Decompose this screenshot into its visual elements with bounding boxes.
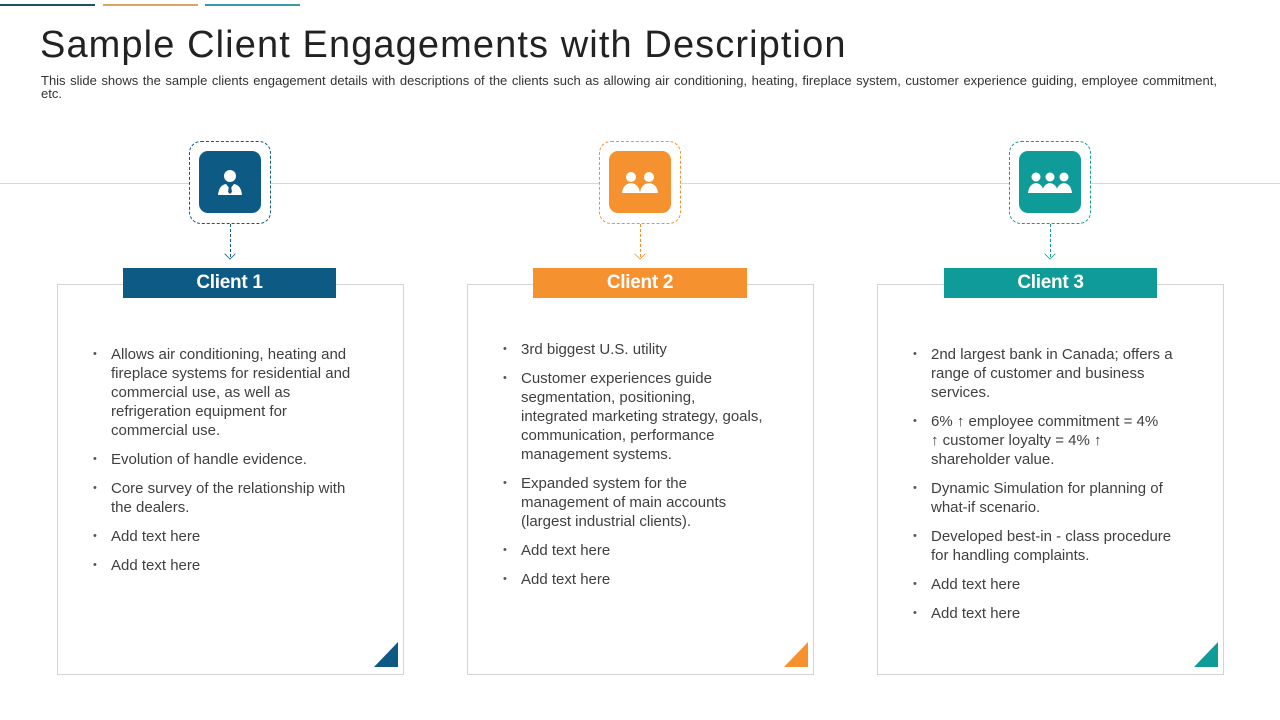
header: Client 1	[196, 272, 263, 293]
header: Client 2	[607, 272, 673, 293]
icon: person	[189, 141, 271, 224]
card	[467, 284, 814, 675]
icon: group	[1009, 141, 1091, 224]
text: Add text here	[111, 528, 200, 545]
text: integrated marketing strategy, goals, communication, performance management systems.	[521, 408, 763, 463]
panel: client 1	[57, 141, 404, 675]
text: Dynamic Simulation for planning of what-if scenario.	[931, 480, 1163, 516]
text: shareholder value.	[931, 451, 1054, 468]
header: Client 3	[1017, 272, 1084, 293]
subtitle: This slide shows the sample clients engagement details with descriptions of the clients such as allowing air conditioning, heating, fireplace system, customer experience guiding, employee commitment, etc.	[41, 73, 1217, 101]
top accent lines	[0, 4, 300, 6]
corner triangle	[1194, 642, 1218, 667]
arrow	[230, 224, 231, 257]
arrow	[640, 224, 641, 257]
text: Evolution of handle evidence.	[111, 451, 307, 468]
text: 2nd largest bank in Canada; offers a range of customer and business services.	[931, 346, 1173, 401]
header	[533, 268, 747, 298]
text: ↑ customer loyalty = 4% ↑	[931, 432, 1101, 449]
corner triangle	[784, 642, 808, 667]
text	[913, 346, 1173, 622]
text: Customer experiences guide segmentation, positioning,	[521, 370, 712, 406]
header	[123, 268, 336, 298]
text: Add text here	[111, 557, 200, 574]
card	[877, 284, 1224, 675]
text: Core survey of the relationship with the dealers.	[111, 480, 345, 516]
text: 6% ↑ employee commitment = 4%	[931, 413, 1158, 430]
text: Add text here	[521, 571, 610, 588]
text: Add text here	[931, 605, 1020, 622]
text: Developed best-in - class procedure for handling complaints.	[931, 528, 1171, 564]
panel: client 2	[467, 141, 814, 675]
text: Allows air conditioning, heating and fireplace systems for residential and commercial use, as well as refrigeration equipment for commercial use.	[111, 346, 350, 439]
arrow	[1050, 224, 1051, 257]
icon: two people	[599, 141, 681, 224]
header	[944, 268, 1157, 298]
text: 3rd biggest U.S. utility	[521, 341, 667, 358]
corner triangle	[374, 642, 398, 667]
text	[93, 346, 350, 574]
text: Expanded system for the management of main accounts (largest industrial clients).	[521, 475, 726, 530]
card	[57, 284, 404, 675]
text: Add text here	[931, 576, 1020, 593]
title: Sample Client Engagements with Description	[40, 24, 847, 66]
text: Add text here	[521, 542, 610, 559]
panel: client 3	[877, 141, 1224, 675]
text	[503, 341, 763, 588]
